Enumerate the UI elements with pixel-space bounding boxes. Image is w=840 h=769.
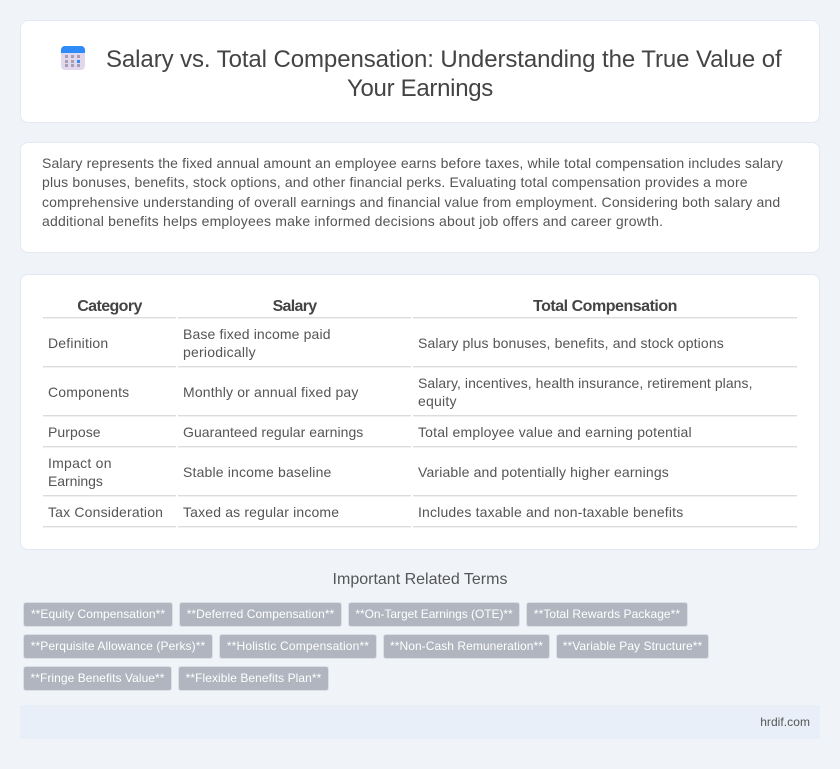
tag: **Holistic Compensation** [227, 639, 369, 653]
panel: comparison table: Taxed as regular income [183, 504, 339, 520]
panel: comparison table: Stable income baseline [183, 464, 332, 480]
panel: comparison table: Total Compensation [533, 298, 677, 315]
tag: **Flexible Benefits Plan** [186, 671, 321, 685]
title: Your Earnings [347, 75, 493, 102]
row: impact on earnings: Earnings [48, 473, 103, 489]
text block: description [42, 155, 783, 229]
tag [23, 666, 172, 691]
panel: comparison table: Monthly or annual fixed pay [183, 384, 359, 400]
text block: description: comprehensive understanding of overall earnings and financial value from employment. Considering both salary and [42, 194, 780, 210]
row: impact on earnings: Impact on [48, 455, 112, 471]
panel: comparison table [20, 274, 820, 550]
tag [383, 634, 550, 659]
tag: **On-Target Earnings (OTE)** [355, 607, 513, 621]
panel: comparison table: Total employee value and earning potential [418, 424, 692, 440]
panel: comparison table: Includes taxable and non-taxable benefits [418, 504, 683, 520]
tag [219, 634, 377, 659]
tag [23, 634, 213, 659]
panel: description [20, 142, 820, 253]
panel: comparison table: Variable and potentially higher earnings [418, 464, 669, 480]
icon: calendar [61, 46, 85, 70]
title [106, 46, 782, 102]
tag: **Non-Cash Remuneration** [390, 639, 543, 653]
text block: description: additional benefits helps employees make informed decisions about job offers and career growth. [42, 213, 663, 229]
tag: **Total Rewards Package** [534, 607, 680, 621]
tag [526, 602, 688, 627]
row: definition: Definition [48, 335, 108, 351]
tag [348, 602, 520, 627]
footer [20, 705, 820, 739]
panel: comparison table: Base fixed income paid [183, 326, 331, 342]
panel: comparison table: equity [418, 393, 457, 409]
row: components: Components [48, 384, 129, 400]
footer text: source: hrdif.com [760, 715, 810, 729]
tag: **Fringe Benefits Value** [30, 671, 165, 685]
panel: comparison table: Salary, incentives, health insurance, retirement plans, [418, 375, 753, 391]
tag: **Variable Pay Structure** [563, 639, 702, 653]
title: Salary vs. Total Compensation: Understanding the True Value of [106, 46, 782, 73]
tag: **Equity Compensation** [31, 607, 165, 621]
panel: comparison table: Salary [273, 298, 316, 315]
row: purpose: Purpose [48, 424, 101, 440]
panel: comparison table: periodically [183, 344, 256, 360]
row: impact on earnings [48, 455, 112, 489]
tag: **Perquisite Allowance (Perks)** [31, 639, 205, 653]
text block: description: Salary represents the fixed annual amount an employee earns before taxes, while total compensation includes salary [42, 155, 783, 171]
panel: comparison table: Salary plus bonuses, benefits, and stock options [418, 335, 724, 351]
tag: **Deferred Compensation** [187, 607, 334, 621]
panel: header [20, 20, 820, 123]
text block: description: plus bonuses, benefits, stock options, and other financial perks. Evaluating total compensation provides a more [42, 174, 748, 190]
tag [178, 666, 329, 691]
row: tax consideration: Tax Consideration [48, 504, 163, 520]
tag [23, 602, 173, 627]
heading: related terms: Important Related Terms [333, 571, 507, 588]
panel: comparison table: Guaranteed regular earnings [183, 424, 363, 440]
tag group: related terms [23, 602, 709, 691]
tag [179, 602, 342, 627]
tag [556, 634, 709, 659]
table header: Category [77, 298, 142, 315]
